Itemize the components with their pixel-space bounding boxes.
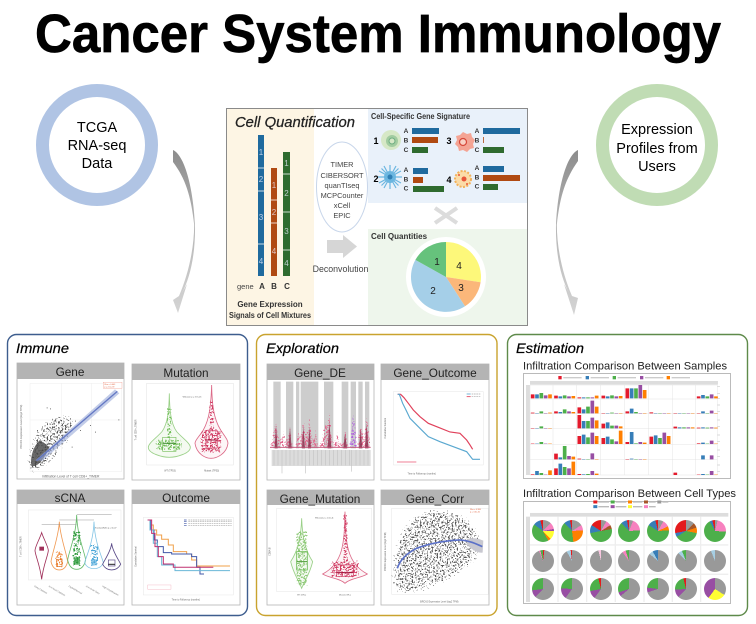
signature 4: 4: [446, 175, 452, 185]
chart: gene scatter: Rho = 0.663: [104, 384, 116, 386]
chart: gene differential expression: [267, 364, 374, 480]
gene expression bars: gene: [237, 282, 254, 291]
chart: sCNA violins: T cell CD8+_TIMER: [21, 536, 23, 557]
gene expression bars: A: [259, 282, 265, 291]
signature 3: B: [475, 138, 480, 144]
method ellipse: quanTIseq: [325, 181, 359, 190]
gene expression bars: 4: [272, 247, 277, 256]
chart: gene mutation violins: Wilcoxon p = 1.6e-11: [315, 517, 334, 519]
heading: immune: Immune: [16, 340, 69, 356]
signature 3: C: [475, 147, 480, 154]
method ellipse: [316, 142, 368, 232]
pie chart: cell quantities: [406, 237, 486, 317]
gene expression bars: 1: [259, 148, 264, 157]
chart: gene correlation scatter: p = 3.6e-31: [470, 512, 480, 514]
chart: sCNA violins: sCNA: [55, 491, 86, 505]
heading: exploration: Exploration: [266, 340, 339, 356]
gene expression bars: [237, 135, 290, 291]
multiply sign: [435, 208, 457, 223]
data source: user expression profiles: Profiles from: [616, 141, 698, 157]
gene expression bars: 2: [272, 208, 277, 217]
chart: gene scatter: PDCD1 Expression Level (log2 TPM): [19, 405, 23, 449]
heading: cell quantification: Cell Quantification: [235, 114, 355, 131]
chart: gene scatter: Gene: [56, 365, 85, 379]
signature 1: C: [404, 147, 409, 154]
chart: gene outcome survival: [381, 364, 489, 480]
panel: exploration: [256, 334, 497, 616]
chart: gene scatter: Infiltration Level of T cell CD8+_TIMER: [42, 474, 100, 478]
chart: mutation violins: Wilcoxon p = 3.7e-05: [183, 397, 202, 399]
data source: TCGA RNA-seq: TCGA: [77, 120, 117, 136]
heading: gene signature: Cell-Specific Gene Signature: [371, 112, 470, 121]
caption: gene expression signals: Gene Expression: [237, 300, 303, 309]
chart: mutation violins: [132, 364, 240, 480]
gene expression bars: 4: [259, 257, 264, 266]
heading: estimation: Estimation: [516, 340, 584, 356]
signature 4: B: [475, 174, 480, 182]
chart: sCNA violins: Kruskal-Wallis p = 3e-07: [95, 526, 116, 529]
signature 2: C: [404, 186, 409, 192]
chart: gene mutation violins: Mutant (GH+): [339, 594, 351, 597]
method ellipse: TIMER: [330, 160, 354, 169]
chart: gene correlation scatter: BRCA2 Expression Level (log2 TPM): [420, 600, 459, 603]
gene expression bars: 3: [259, 213, 264, 222]
chart: gene correlation scatter: [381, 490, 489, 605]
panel: cell quantification: Signals of Cell Mixtures: [229, 311, 311, 320]
method ellipse: xCell: [334, 201, 351, 210]
pie chart: cell quantities: 4: [456, 261, 462, 272]
chart: gene mutation violins: [267, 490, 374, 605]
gene expression bars: 2: [284, 189, 289, 198]
method ellipse: EPIC: [333, 211, 351, 220]
signature 1: [373, 128, 439, 154]
panel: estimation: [508, 334, 748, 616]
signature 2: 2: [373, 174, 379, 184]
gene expression bars: 1: [284, 159, 289, 168]
chart: gene mutation violins: Gene_Mutation: [280, 492, 360, 506]
chart: mutation violins: T cell CD8+_TIMER: [136, 419, 138, 440]
signature 4: C: [475, 184, 480, 190]
chart: gene scatter: [17, 363, 124, 479]
chart: sCNA violins: Arm-level Deletion: [48, 585, 66, 597]
data source: TCGA RNA-seq: RNA-seq: [68, 138, 126, 154]
chart: sCNA violins: High Amplification: [101, 585, 120, 597]
pie chart: cell quantities: 1: [434, 257, 440, 268]
chart: gene correlation scatter: Gene_Corr: [406, 492, 464, 506]
chart: sCNA violins: Arm-level Gain: [85, 585, 101, 596]
signature 3: 3: [446, 136, 452, 146]
signature 2: A: [404, 167, 409, 174]
gene expression bars: 2: [259, 175, 264, 184]
gene expression bars: B: [271, 282, 277, 291]
chart: mutation violins: WT (TP53): [164, 470, 176, 472]
signature 1: B: [404, 138, 409, 144]
method ellipse: CIBERSORT: [321, 171, 364, 180]
chart: gene mutation violins: WT (GH+): [297, 595, 307, 597]
chart: gene mutation violins: CD8A/B: [269, 547, 272, 556]
arrow: right curved: [556, 150, 578, 315]
data source: TCGA RNA-seq: Data: [82, 156, 113, 172]
chart: sCNA violins: Diploid/Normal: [68, 585, 83, 595]
chart: outcome survival: Outcome: [162, 491, 210, 505]
panel: cell quantification: [226, 108, 528, 326]
chart: gene correlation scatter: Rho = 0.386: [470, 509, 482, 511]
chart: mutation violins: Mutant (TP53): [204, 469, 219, 472]
chart: cell type pies: [523, 501, 731, 604]
signature 2: B: [404, 176, 409, 184]
chart: gene scatter: p = 2.1e-59: [104, 386, 115, 388]
chart: outcome survival: Time to Follow-up (months): [172, 599, 200, 602]
subheading: cell types: Infiltration Comparison Between Cell Types: [523, 488, 737, 500]
chart: outcome survival: [132, 490, 240, 605]
pie chart: cell quantities: 3: [458, 283, 464, 294]
subheading: samples: Infiltration Comparison Between Samples: [523, 360, 728, 372]
signature 1: 1: [373, 136, 379, 146]
signature 3: A: [475, 128, 480, 135]
panel: immune: [8, 334, 248, 616]
chart: gene differential expression: Gene_DE: [294, 366, 346, 380]
method ellipse: MCPCounter: [321, 191, 364, 200]
signature 4: [446, 165, 520, 190]
gene expression bars: C: [284, 282, 290, 291]
pie chart: cell quantities: 2: [430, 286, 436, 297]
data source: user expression profiles: Users: [638, 159, 676, 175]
signature 4: A: [475, 165, 480, 172]
gene expression bars: 4: [284, 259, 289, 268]
chart: gene outcome survival: Cumulative Survival: [384, 418, 387, 439]
gene expression bars: 1: [272, 181, 277, 190]
signature 2: [373, 165, 444, 192]
arrow: left curved: [173, 150, 195, 313]
data source: TCGA RNA-seq: [42, 90, 152, 200]
chart: sCNA violins: [17, 490, 124, 605]
deconvolution label: Deconvolution: [313, 264, 368, 274]
chart: gene outcome survival: Time to Follow-up (months): [408, 472, 436, 475]
chart: gene correlation scatter: PDCD1 Expression Level (log2 TPM): [384, 532, 387, 571]
chart: mutation violins: Mutation: [163, 366, 209, 380]
data source: user expression profiles: [602, 90, 712, 200]
gene expression bars: 3: [284, 227, 289, 236]
deconvolution arrow: [327, 235, 357, 258]
heading: cell quantities: Cell Quantities: [371, 232, 428, 241]
signature 1: A: [404, 128, 409, 135]
chart: sCNA violins: Deep Deletion: [33, 585, 48, 595]
signature 3: [446, 128, 520, 154]
chart: outcome survival: Cumulative Survival: [135, 546, 138, 567]
data source: user expression profiles: Expression: [621, 122, 693, 138]
title: Cancer System Immunology: [35, 4, 721, 64]
chart: sample comparison bars: [524, 374, 730, 478]
chart: gene outcome survival: Gene_Outcome: [393, 366, 477, 380]
